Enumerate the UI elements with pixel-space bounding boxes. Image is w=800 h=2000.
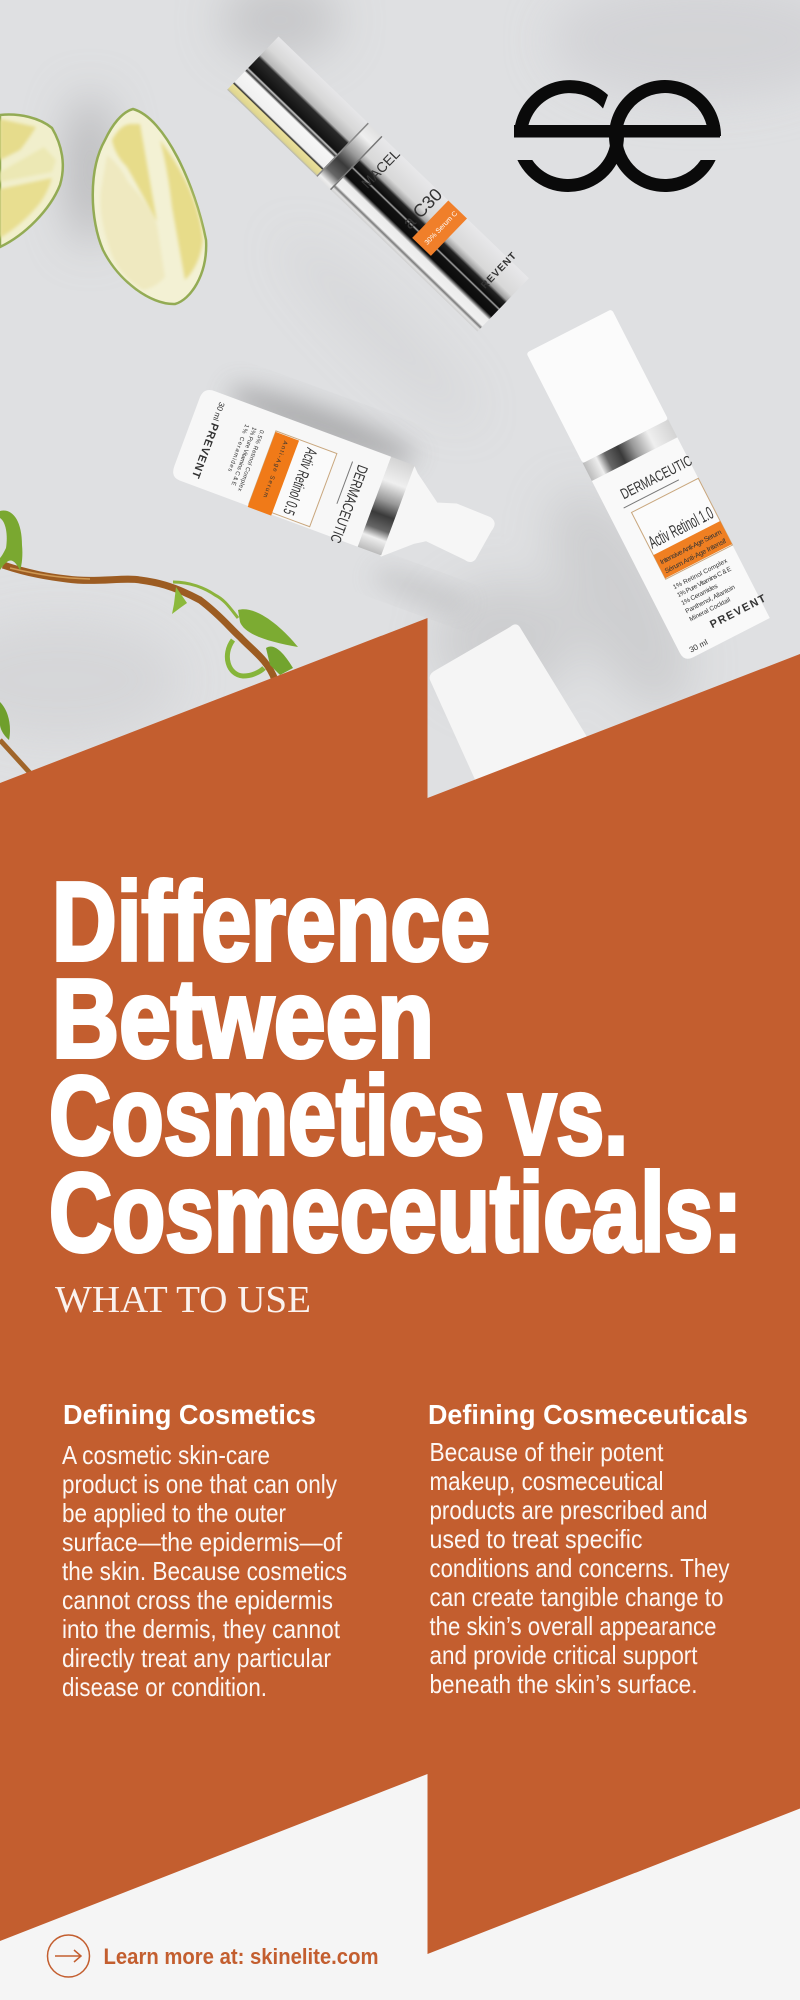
white bottle: 1% Retinol Complex <box>672 557 729 591</box>
pump bottle: 0.5% Retinol Complex <box>236 429 264 492</box>
panel: defining cosmeceuticals <box>428 1399 748 1699</box>
title: Difference <box>52 860 490 984</box>
body text: A cosmetic skin-care <box>62 1440 270 1470</box>
heading: Defining Cosmetics <box>63 1399 316 1430</box>
silver bottle: a C30 <box>398 184 446 233</box>
body text: makeup, cosmeceutical <box>430 1466 664 1496</box>
white bottle: Mineral Cocktail <box>688 596 732 623</box>
silver bottle: 30% Serum C <box>424 210 459 247</box>
body text: conditions and concerns. They <box>430 1553 730 1583</box>
body text: used to treat specific <box>430 1524 642 1554</box>
title <box>49 860 742 1275</box>
body text: surface—the epidermis—of <box>62 1527 343 1557</box>
white bottle: 30 ml <box>688 638 709 655</box>
body text: be applied to the outer <box>62 1498 286 1528</box>
pump bottle: 1% Ceramides <box>226 423 249 472</box>
body text: the skin’s overall appearance <box>430 1611 716 1641</box>
white bottle: Panthenol, Allantoin <box>684 584 737 615</box>
body text: into the dermis, they cannot <box>62 1614 341 1644</box>
call to action: Learn more at: skinelite.com <box>104 1944 378 1969</box>
white bottle: 1% Pure Vitamins C & E <box>676 565 733 599</box>
white bottle: 1% Ceramides <box>680 582 720 607</box>
pump bottle: 1% Pure Vitamins C & E <box>230 426 257 486</box>
pump bottle: Anti-Age Serum <box>261 440 288 498</box>
body text: directly treat any particular <box>62 1643 331 1673</box>
body text: Because of their potent <box>430 1437 664 1467</box>
silver bottle <box>227 31 535 331</box>
logo <box>514 80 721 192</box>
body text <box>430 1437 730 1699</box>
body text: the skin. Because cosmetics <box>62 1556 347 1586</box>
white bottle: DERMACEUTIC <box>618 452 695 503</box>
silver bottle: MACEL <box>358 145 403 191</box>
body text: products are prescribed and <box>430 1495 708 1525</box>
pump bottle: PREVENT <box>189 421 220 481</box>
subtitle: WHAT TO USE <box>55 1279 311 1321</box>
white bottle <box>526 306 776 662</box>
pump bottle <box>169 387 503 592</box>
white bottle: Activ Retinol 1.0 <box>645 503 717 552</box>
white bottle: Intensive Anti-Age Serum <box>659 529 723 566</box>
pump bottle: DERMACEUTIC <box>326 462 371 545</box>
body text: cannot cross the epidermis <box>62 1585 333 1615</box>
body text: and provide critical support <box>430 1640 698 1670</box>
bottle cap <box>430 624 592 795</box>
body text: beneath the skin’s surface. <box>430 1669 698 1699</box>
plant branch <box>0 511 298 773</box>
product photo <box>0 0 800 830</box>
white bottle: Sérum Anti-Age Intensif <box>664 538 728 575</box>
heading: Defining Cosmeceuticals <box>428 1399 748 1430</box>
pump bottle: 30 ml <box>211 401 226 422</box>
orange panel <box>0 618 800 1954</box>
white bottle: PREVENT <box>708 592 769 631</box>
silver bottle: REVENT <box>479 250 520 291</box>
title: Cosmetics vs. <box>49 1054 628 1178</box>
panel: defining cosmetics <box>62 1399 347 1702</box>
pump bottle: Activ Retinol 0.5 <box>279 445 320 517</box>
body text <box>62 1440 347 1702</box>
body text: can create tangible change to <box>430 1582 724 1612</box>
icon: arrow in circle <box>48 1935 90 1977</box>
title: Between <box>52 957 434 1081</box>
body text: product is one that can only <box>62 1469 337 1499</box>
lime wedges <box>0 109 206 304</box>
body text: disease or condition. <box>62 1672 267 1702</box>
